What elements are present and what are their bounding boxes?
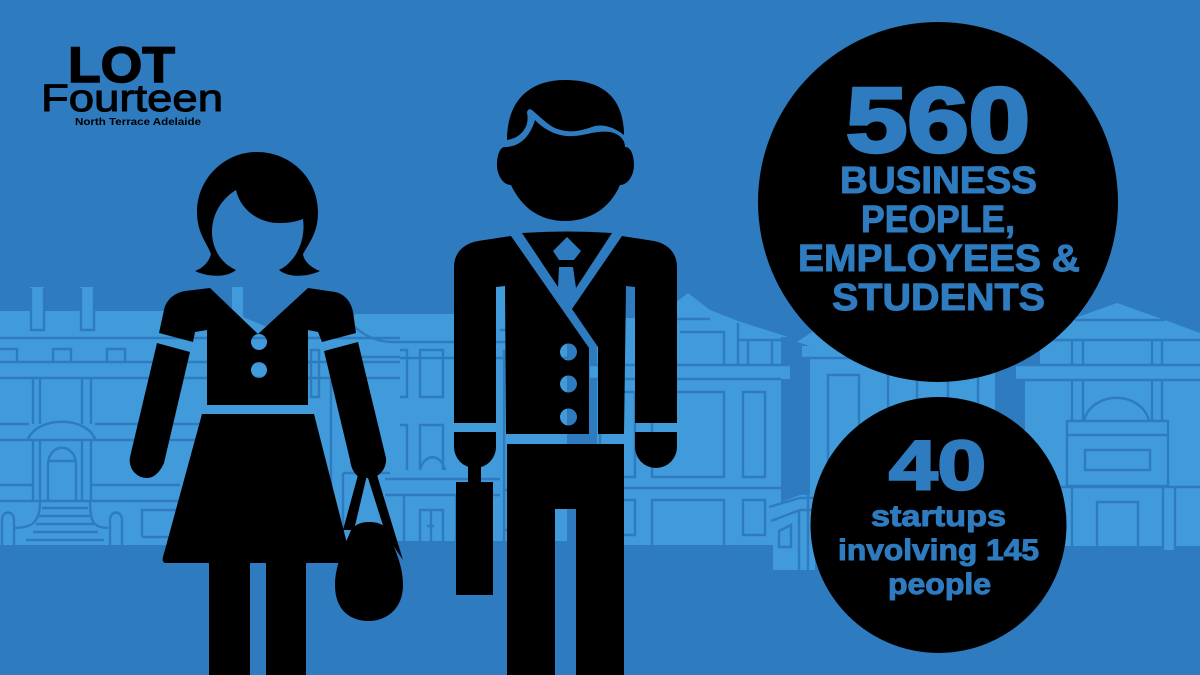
callout: 40 startups circle: 40 <box>889 426 986 504</box>
logo: Lot Fourteen <box>41 37 223 128</box>
man head <box>497 120 634 221</box>
logo: Lot Fourteen: LOT <box>68 37 175 93</box>
man jacket right side <box>572 236 677 434</box>
briefcase <box>456 462 493 595</box>
figure: businessman <box>454 80 677 675</box>
man hands <box>454 432 677 468</box>
logo: Lot Fourteen: Fourteen <box>41 78 223 120</box>
callout: 40 startups circle: people <box>888 568 991 601</box>
man legs <box>507 444 624 675</box>
callout: 560 people circle: STUDENTS <box>832 277 1045 319</box>
woman hair <box>195 152 320 276</box>
building: tall townhouse <box>797 320 995 545</box>
callout: 560 people circle: 560 <box>846 70 1030 172</box>
building: central hall <box>340 285 567 545</box>
callout: 40 startups circle: startups <box>871 500 1006 533</box>
woman right arm <box>324 342 386 478</box>
woman left arm <box>130 343 190 478</box>
illustration: heritage buildings skyline <box>0 285 1200 570</box>
building: right pavilion <box>1016 303 1200 550</box>
callout: 40 startups circle <box>810 397 1066 653</box>
callout: 40 startups circle: involving 145 <box>838 534 1039 567</box>
woman skirt <box>163 414 352 563</box>
man hair <box>507 80 624 140</box>
callout: 560 people circle: EMPLOYEES & <box>798 238 1080 280</box>
handbag <box>335 475 403 621</box>
building: left mansion <box>0 287 400 545</box>
figure: woman <box>130 152 403 675</box>
woman legs <box>209 560 306 675</box>
woman blouse <box>159 288 356 405</box>
callout: 560 people circle <box>758 22 1118 382</box>
logo: Lot Fourteen: North Terrace Adelaide <box>75 117 202 128</box>
man collar and tie <box>522 232 612 288</box>
building: small outbuilding <box>769 493 815 570</box>
building: gabled house <box>590 293 790 545</box>
callout: 560 people circle: PEOPLE, <box>861 199 1015 241</box>
man jacket left side <box>454 236 589 434</box>
callout: 560 people circle: BUSINESS <box>840 160 1037 202</box>
